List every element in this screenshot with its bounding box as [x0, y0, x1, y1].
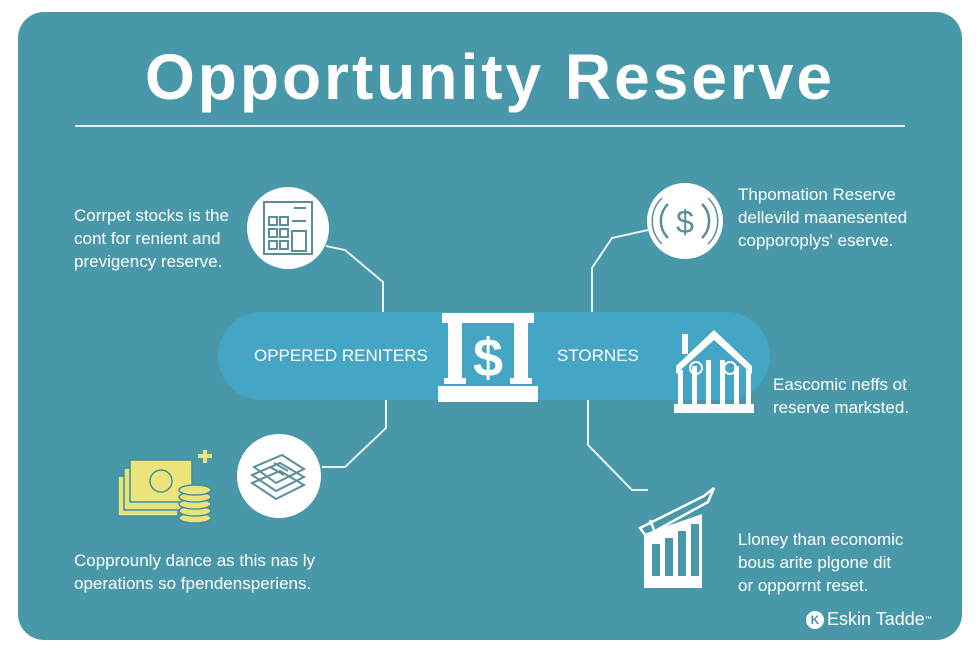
- logo: Eskin Tadde: [827, 609, 925, 629]
- icon: papers circle: [237, 434, 321, 518]
- icon: bank dollar: [438, 313, 538, 402]
- text: bottom left: [74, 551, 315, 593]
- icon: money and coins: [118, 450, 212, 524]
- text: middle right: reserve marksted.: [773, 398, 909, 417]
- text: bottom left: Copprounly dance as this nas ly: [74, 551, 315, 570]
- text: bottom left: operations so fpendensperiens.: [74, 574, 311, 593]
- icon: house columns: [674, 330, 754, 413]
- title: Opportunity Reserve: [145, 41, 835, 113]
- text: top right: copporoplys' eserve.: [738, 231, 893, 250]
- text: middle right: Eascomic neffs ot: [773, 375, 907, 394]
- text: middle right: [773, 375, 909, 417]
- icon: calculator circle: [247, 187, 329, 269]
- text: top right: Thpomation Reserve: [738, 185, 896, 204]
- pill label left: OPPERED RENITERS: [254, 346, 428, 365]
- text: bottom right: Lloney than economic: [738, 530, 903, 549]
- icon: bank dollar: $: [473, 328, 503, 388]
- text: bottom right: bous arite plgone dit: [738, 553, 891, 572]
- logo: K: [811, 612, 819, 626]
- text: bottom right: [738, 530, 903, 595]
- text: top left: previgency reserve.: [74, 252, 222, 271]
- pill label right: STORNES: [557, 346, 639, 365]
- icon: dollar circle: [647, 183, 723, 259]
- text: bottom right: or opporrnt reset.: [738, 576, 868, 595]
- text: top right: dellevild maanesented: [738, 208, 907, 227]
- text: top left: cont for renient and: [74, 229, 220, 248]
- text: top right: [738, 185, 907, 250]
- logo: ™: [925, 616, 932, 623]
- text: top left: Corrpet stocks is the: [74, 206, 229, 225]
- pill: [218, 312, 770, 400]
- icon: chart with pen: [638, 487, 716, 588]
- text: top left: [74, 206, 229, 271]
- icon: dollar circle: $: [676, 204, 694, 240]
